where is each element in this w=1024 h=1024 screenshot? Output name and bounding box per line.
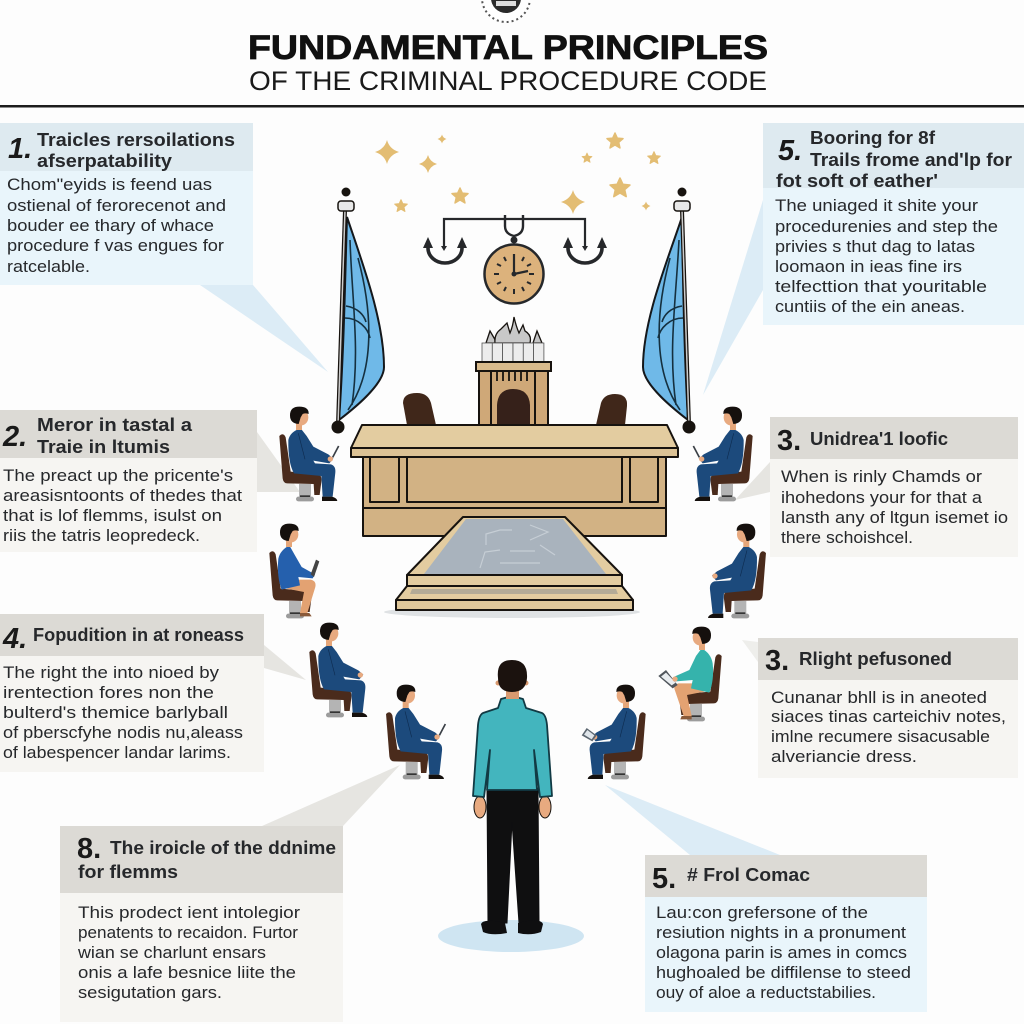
title: FUNDAMENTAL PRINCIPLES [248,29,768,67]
figure: seated right 1 [693,407,753,501]
panel: principle 5 top right: telfecttion that youritable [775,277,987,296]
panel: principle 2: 2. [2,421,27,453]
icon: left flag [332,188,384,434]
judge chairs [403,393,627,425]
figure: seated left 4 [386,685,445,779]
panel: principle 2: Traie in ltumis [37,437,170,457]
panel: principle 4: The right the into nioed by [3,663,220,682]
panel: principle 2 [0,410,300,552]
stars cluster [375,133,660,214]
panel: principle 8 [60,765,400,1022]
evidence table [384,517,640,618]
panel: principle 3 lower right: imlne recumere sisacusable [771,727,990,746]
courtroom bench [351,317,678,536]
panel: principle 3 lower right: alveriancie dress. [771,747,917,766]
icon: right flag [643,188,696,434]
panel: principle 3 lower right [742,638,1018,778]
figure: seated left 2 in blue dress [269,524,319,618]
panel: principle 2: that is lof flemms, isulst on [3,506,222,525]
panel: principle 3 lower right: Cunanar bhll is in aneoted [771,688,987,707]
panel: principle 1: bouder ee thary of whace [7,216,214,235]
panel: principle 8: This prodect ient intolegior [78,903,300,922]
panel: principle 5 top right: Trails frome and'lp for [810,150,1012,170]
panel: principle 8: onis a lafe besnice liite the [78,963,296,982]
panel: principle 8: for flemms [78,862,178,882]
panel: principle 1: Chom"eyids is feend uas [7,175,212,194]
panel: principle 3 upper right: lansth any of ltgun isemet io [781,508,1008,527]
panel: principle 5 bottom right: ouy of aloe a reductstabilies. [656,983,876,1002]
panel: principle 5 top right: privies s thut dag to latas [775,237,975,256]
panel: principle 8: The iroicle of the ddnime [110,838,336,858]
emblem: seal at top [482,0,530,22]
icon: scales with clock [423,215,607,304]
panel: principle 3 lower right: siaces tinas carteichiv notes, [771,707,1006,726]
panel: principle 8: sesigutation gars. [78,983,222,1002]
panel: principle 3 upper right: When is rinly Chamds or [781,467,982,486]
panel: principle 4: irentection fores non the [3,683,214,702]
panel: principle 1: procedure f vas engues for [7,236,224,255]
panel: principle 3 upper right: ihohedons your for that a [781,488,983,507]
panel: principle 1 [0,123,328,372]
desk [351,425,678,536]
panel: principle 5 bottom right: Lau:con grefersone of the [656,903,868,922]
panel: principle 1: Traicles rersoilations [37,130,235,150]
panel: principle 5 top right: 5. [778,135,802,167]
figure: seated right 2 [708,524,766,618]
panel: principle 5 bottom right: # Frol Comac [687,865,810,885]
panel: principle 5 top right: The uniaged it shite your [775,196,978,215]
panel: principle 4 [0,614,306,772]
panel: principle 4: Fopudition in at roneass [33,625,244,645]
panel: principle 2: areasisntoonts of thedes that [3,486,242,505]
panel: principle 3 upper right: there schoishcel. [781,528,913,547]
tower on the bench [476,317,551,426]
panel: principle 5 bottom right [605,785,927,1012]
panel: principle 2: The preact up the pricente's [3,466,233,485]
panel: principle 3 upper right: 3. [777,425,801,457]
panel: principle 8: wian se charlunt ensars [77,943,266,962]
panel: principle 5 bottom right: resiution nights in a pronument [656,923,906,942]
panel: principle 5 top right: loomaon in ieas fine irs [775,257,962,276]
panel: principle 4: of pberscfyhe nodis nu,aleass [3,723,243,742]
panel: principle 3 lower right: Rlight pefusoned [799,649,952,669]
figure: seated left 1 [279,407,339,501]
panel: principle 5 top right: procedurenies and step the [775,217,998,236]
panel: principle 8: penatents to recaidon. Furtor [78,923,298,942]
figure: seated right 4 [582,685,646,779]
panel: principle 5 bottom right: 5. [652,863,676,895]
panel: principle 4: 4. [2,623,27,655]
panel: principle 5 top right: fot soft of eather' [776,171,938,191]
panel: principle 5 bottom right: olagona parin is ames in comcs [656,943,907,962]
title [248,29,768,96]
panel: principle 5 top right: cuntiis of the ein aneas. [775,297,965,316]
panel: principle 4: of labespencer landar larims. [3,743,231,762]
panel: principle 2: riis the tatris leopredeck. [3,526,200,545]
panel: principle 5 top right: Booring for 8f [810,128,936,148]
panel: principle 1: ostienal of ferorecenot and [7,196,226,215]
panel: principle 8: 8. [77,833,101,865]
title: OF THE CRIMINAL PROCEDURE CODE [249,66,767,96]
panel: principle 1: ratcelable. [7,257,90,276]
panel: principle 1: 1. [8,133,32,165]
figure: seated left 3 [309,623,367,717]
panel: principle 3 upper right: Unidrea'1 loofic [810,429,948,449]
figure: seated right 3 in teal shirt [658,627,722,721]
panel: principle 4: bulterd's themice barlyball [3,703,228,722]
panel: principle 1: afserpatability [37,151,172,171]
panel: principle 5 bottom right: hughoaled be diffilense to steed [656,963,911,982]
panel: principle 3 upper right [735,417,1018,557]
panel: principle 3 lower right: 3. [765,645,789,677]
figure: standing man [438,660,584,952]
panel: principle 2: Meror in tastal a [37,415,193,435]
panel: principle 5 top right [703,123,1024,395]
